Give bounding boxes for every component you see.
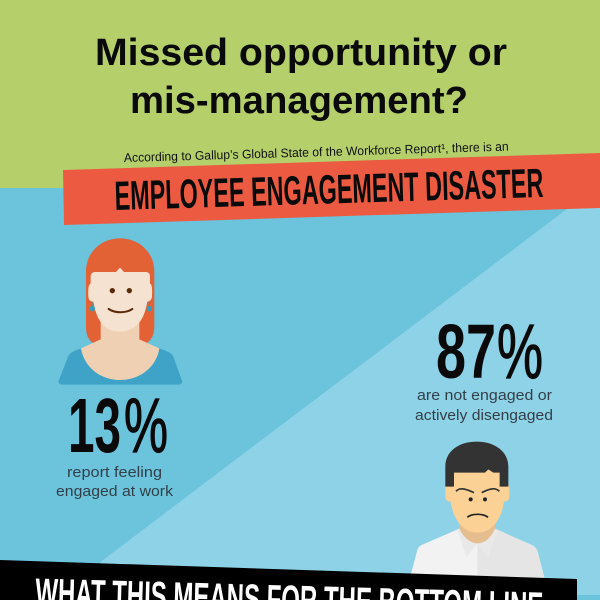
black banner (0, 560, 577, 600)
stat caption: actively disengaged (415, 407, 553, 424)
icon: man (409, 442, 547, 587)
stat: 87%: % (497, 309, 543, 395)
stat: 13%: 13 (68, 383, 121, 469)
stat caption (56, 464, 174, 500)
title (95, 32, 507, 122)
stat caption: report feeling (67, 464, 162, 481)
stat: 13%: % (124, 383, 168, 469)
red banner (63, 153, 600, 225)
stat caption: are not engaged or (417, 387, 552, 404)
title: mis-management? (130, 80, 468, 122)
background: blue panel (0, 188, 600, 600)
title: Missed opportunity or (95, 32, 507, 74)
icon: woman (59, 238, 182, 385)
stat: 87%: 87 (436, 309, 496, 395)
background: light blue diagonal panel (60, 205, 600, 600)
stat: 87% (415, 309, 553, 424)
background: green header (0, 0, 600, 188)
stat caption (415, 387, 553, 424)
intro text: According to Gallup’s Global State of the Workforce Report¹, there is an (124, 140, 509, 165)
stat caption: engaged at work (56, 483, 174, 500)
stat: 13% (56, 383, 174, 500)
